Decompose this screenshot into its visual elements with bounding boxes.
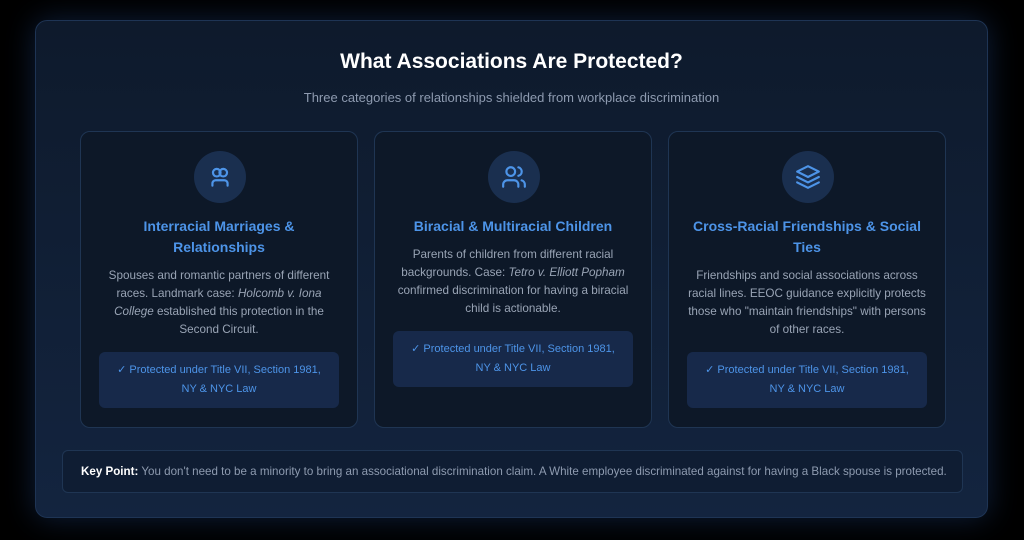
protection box: ✓ Protected under Title VII, Section 1981, bbox=[117, 364, 321, 376]
protection box: ✓ Protected under Title VII, Section 1981, bbox=[705, 364, 909, 376]
card: interracial marriages bbox=[80, 131, 358, 428]
title: What Associations Are Protected? bbox=[340, 50, 683, 73]
protection box: NY & NYC Law bbox=[182, 383, 256, 395]
heading: Biracial & Multiracial Children bbox=[414, 218, 612, 234]
protection box bbox=[99, 352, 339, 408]
icon: rings bbox=[194, 151, 246, 203]
body text: Parents of children from different racial bbox=[413, 248, 613, 261]
icon: users bbox=[488, 151, 540, 203]
heading bbox=[693, 218, 921, 255]
body text: Spouses and romantic partners of different bbox=[109, 269, 329, 282]
heading: Cross-Racial Friendships & Social bbox=[693, 218, 921, 234]
card: biracial children bbox=[374, 131, 652, 428]
protection box bbox=[393, 331, 633, 387]
body text: of other races. bbox=[770, 323, 844, 336]
heading: Interracial Marriages & bbox=[144, 218, 294, 234]
protection box bbox=[687, 352, 927, 408]
body text bbox=[109, 269, 330, 336]
key point callout bbox=[62, 450, 963, 493]
icon: layers bbox=[782, 151, 834, 203]
body text: racial lines. EEOC guidance explicitly protects bbox=[688, 287, 926, 300]
heading: Relationships bbox=[173, 239, 265, 255]
body text: those who "maintain friendships" with persons bbox=[688, 305, 926, 318]
protection box: NY & NYC Law bbox=[476, 362, 550, 374]
key point callout: Key Point: You don't need to be a minority to bring an associational discrimination claim. A White employee discriminated against for having a Black spouse is protected. bbox=[81, 465, 947, 478]
heading: Ties bbox=[793, 239, 821, 255]
body text: confirmed discrimination for having a biracial bbox=[398, 284, 628, 297]
body text: Second Circuit. bbox=[179, 323, 259, 336]
body text: College established this protection in the bbox=[114, 305, 324, 318]
body text: Friendships and social associations across bbox=[696, 269, 918, 282]
body text: races. Landmark case: Holcomb v. Iona bbox=[116, 287, 322, 300]
body text bbox=[688, 269, 926, 336]
protection box: ✓ Protected under Title VII, Section 1981, bbox=[411, 343, 615, 355]
body text bbox=[398, 248, 628, 315]
body text: backgrounds. Case: Tetro v. Elliott Popham bbox=[401, 266, 625, 279]
card: cross-racial friendships bbox=[668, 131, 946, 428]
protection box: NY & NYC Law bbox=[770, 383, 844, 395]
subtitle: Three categories of relationships shielded from workplace discrimination bbox=[304, 90, 719, 105]
heading bbox=[144, 218, 294, 255]
body text: child is actionable. bbox=[465, 302, 561, 315]
